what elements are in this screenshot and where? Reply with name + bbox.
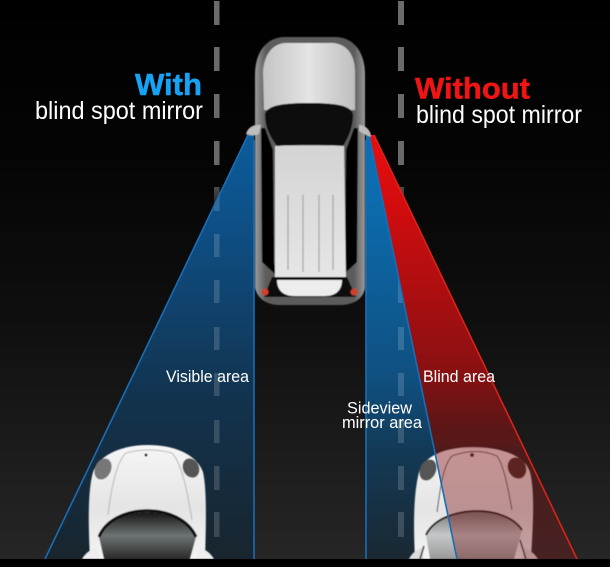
rear section xyxy=(264,277,356,297)
rear window xyxy=(277,280,342,296)
car: following car in right lane xyxy=(409,447,538,559)
left blue beam: with blind spot mirror xyxy=(45,135,254,559)
windshield xyxy=(265,103,353,146)
blue beam edge lines xyxy=(45,135,457,559)
right side mirror xyxy=(359,125,371,137)
heading: without blind spot mirror xyxy=(415,72,582,129)
label: blind area: Blind area xyxy=(423,367,496,386)
roof ribs xyxy=(288,195,333,272)
label: visible area: Visible area xyxy=(166,367,250,386)
label: sideview mirror area: mirror area xyxy=(342,413,423,432)
car: following car in left lane xyxy=(82,445,214,559)
bottom black band xyxy=(0,559,610,567)
main car: top view xyxy=(246,37,371,305)
side windows xyxy=(261,128,276,275)
hood xyxy=(263,43,355,110)
heading: with blind spot mirror: With xyxy=(135,67,202,102)
heading: without blind spot mirror: Without xyxy=(415,72,530,106)
red beam: blind area xyxy=(370,135,577,559)
tail lights xyxy=(262,288,268,296)
label: sideview mirror area: Sideview xyxy=(347,398,413,418)
heading: with blind spot mirror xyxy=(35,67,203,125)
red beam edge line xyxy=(374,135,577,559)
car body xyxy=(255,37,365,305)
left side mirror xyxy=(246,125,261,136)
heading: without blind spot mirror: blind spot mirror xyxy=(416,101,582,129)
heading: with blind spot mirror: blind spot mirror xyxy=(35,97,203,125)
roof xyxy=(275,145,346,279)
label: sideview mirror area xyxy=(342,398,423,432)
right blue beam: sideview mirror area xyxy=(366,135,457,559)
lane markings xyxy=(214,1,404,537)
